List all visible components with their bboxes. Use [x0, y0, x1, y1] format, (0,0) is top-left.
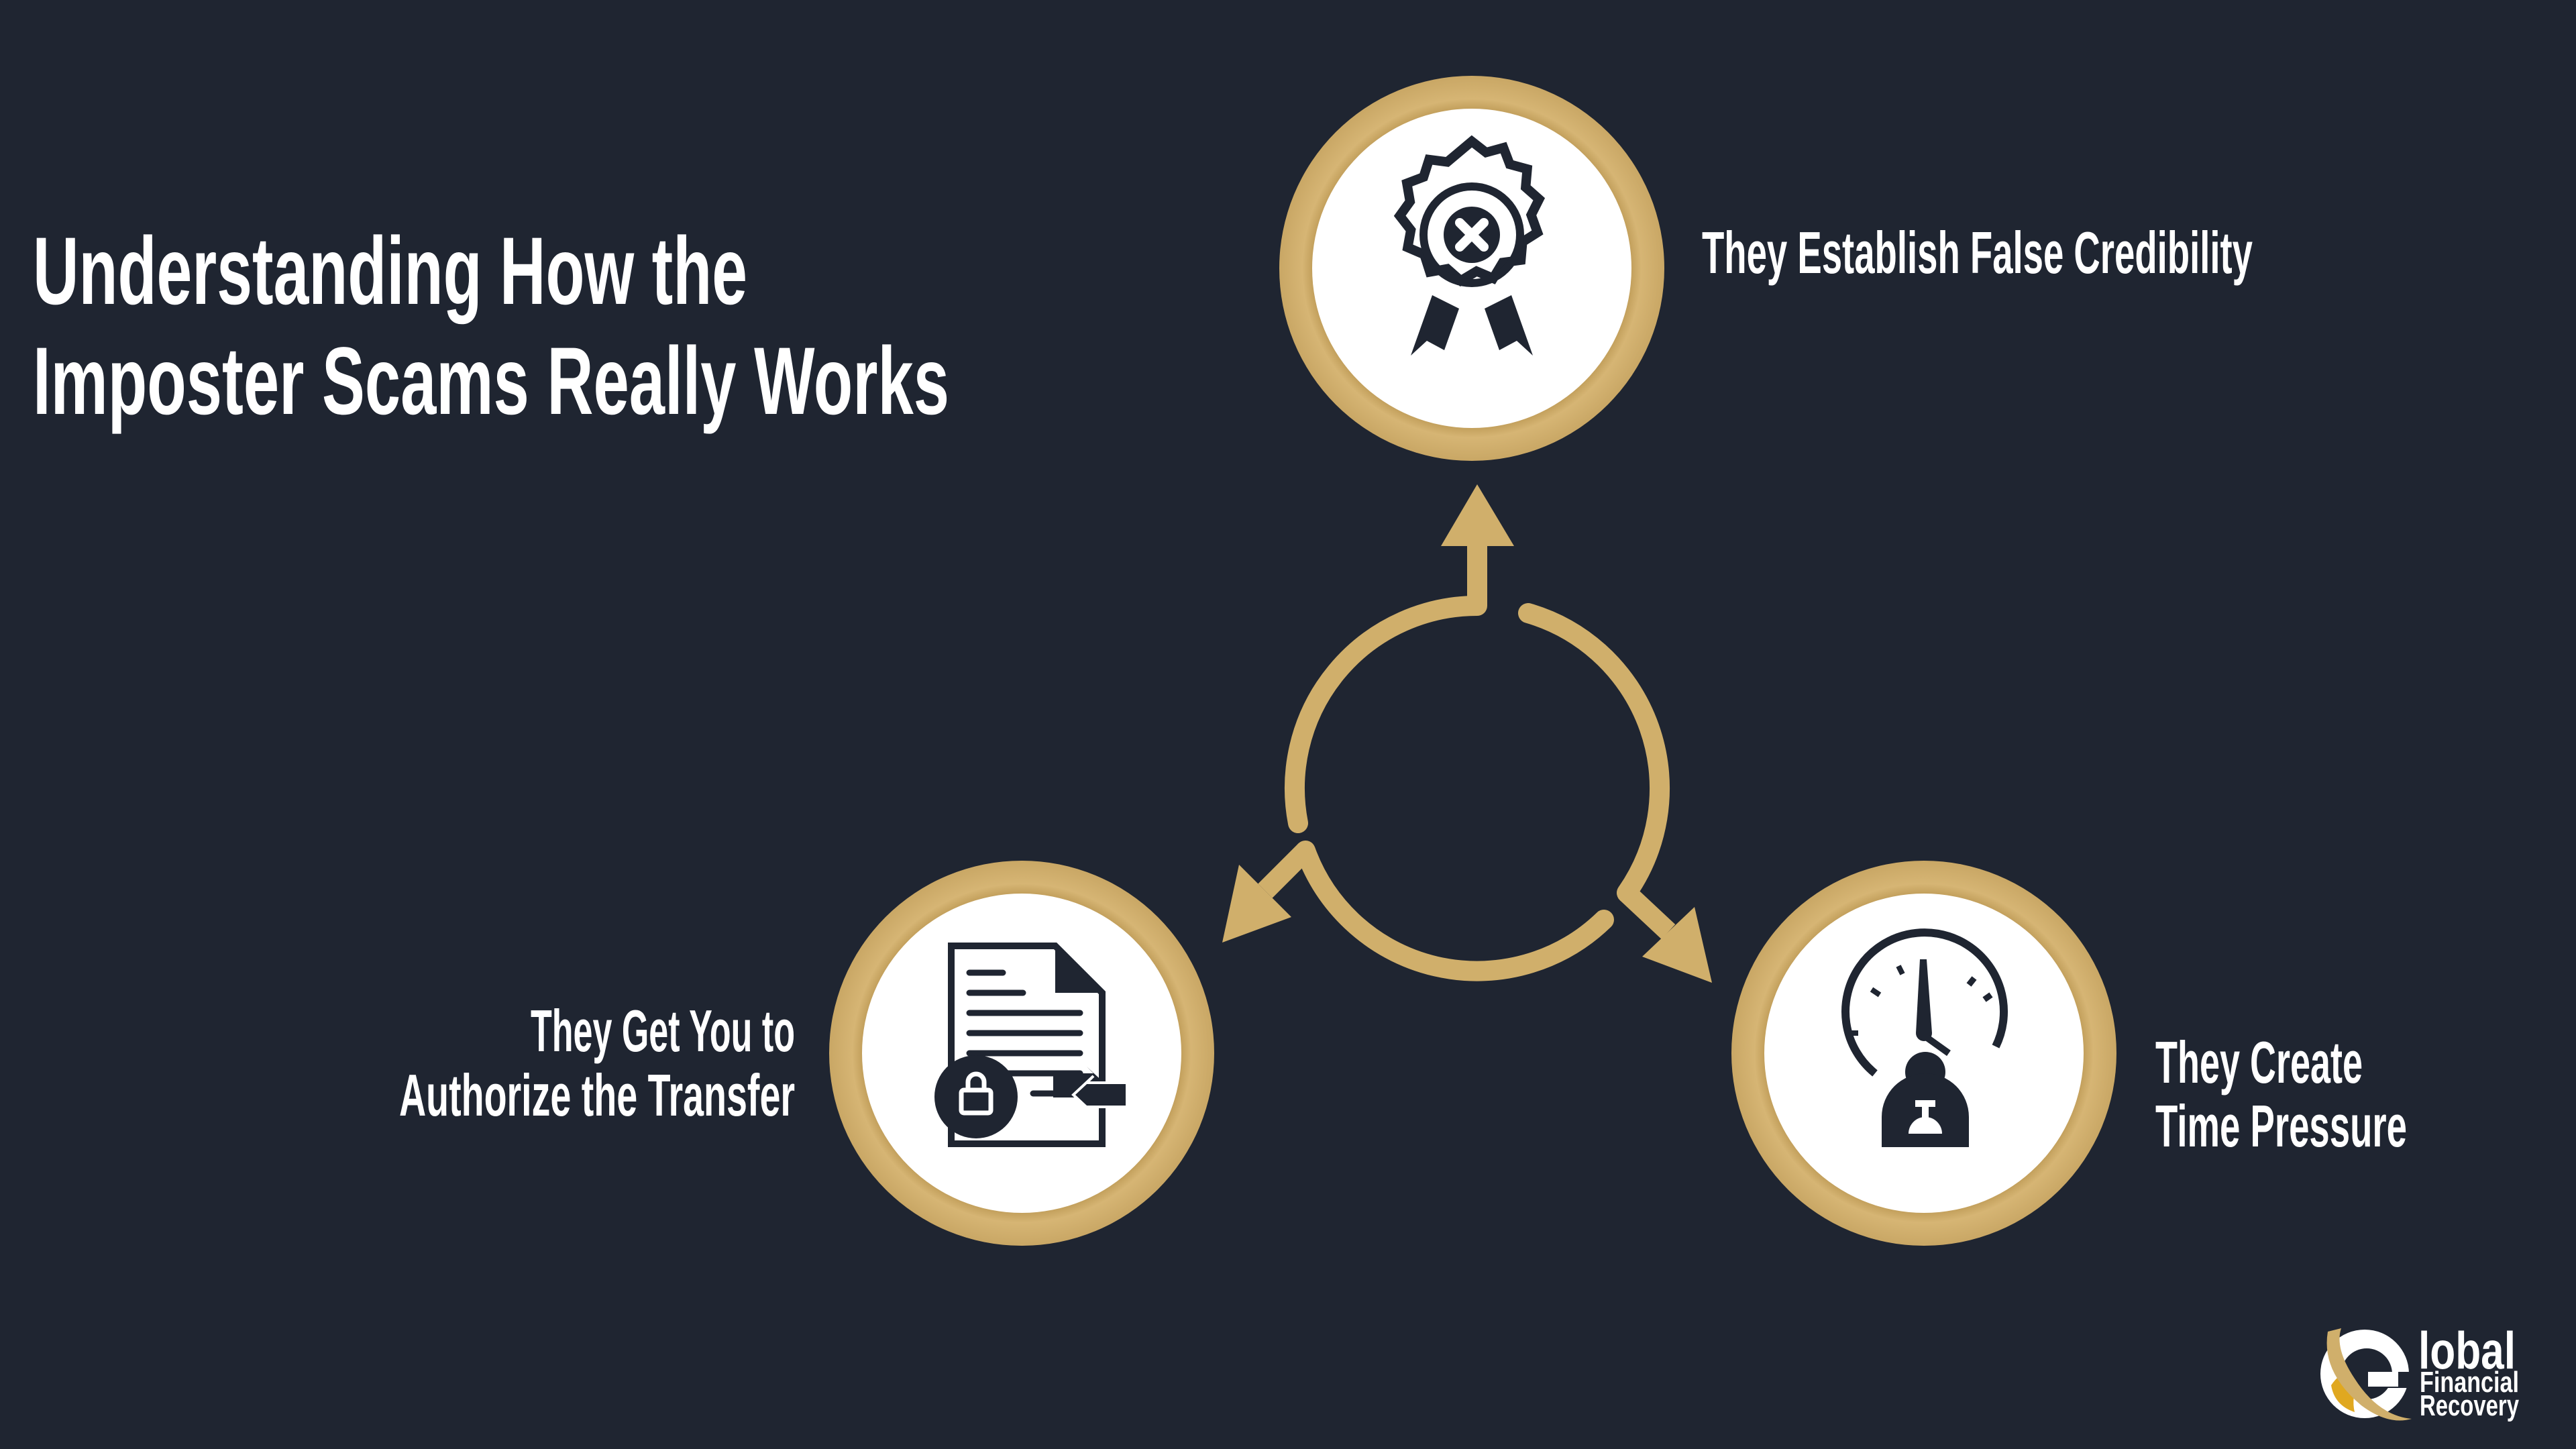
step 3 label: Time Pressure: [2155, 1093, 2407, 1159]
logo: Recovery: [2420, 1389, 2519, 1422]
step 2 circle: authorize transfer: [829, 861, 1214, 1246]
arc: right with down-right arrow: [1528, 613, 1712, 983]
step 1 circle: credibility badge: [1279, 76, 1664, 461]
title: [33, 218, 949, 435]
step 3 circle: time pressure: [1731, 861, 2116, 1246]
step 3 label: They Create: [2155, 1029, 2363, 1095]
logo: lobal: [2418, 1321, 2516, 1380]
step 2 label: Authorize the Transfer: [399, 1062, 795, 1128]
logo: [2320, 1321, 2519, 1422]
step 3 label: [2155, 1029, 2407, 1159]
icon: document with lock and arrows: [934, 946, 1127, 1144]
icon: badge with x: [1400, 142, 1539, 356]
cycle ring with arrows: [1222, 484, 1712, 983]
arc: top-left with up arrow: [1295, 484, 1514, 823]
step 1 label: They Establish False Credibility: [1702, 219, 2253, 286]
logo: Financial: [2420, 1366, 2519, 1399]
title: Imposter Scams Really Works: [33, 328, 949, 435]
step 2 label: They Get You to: [531, 998, 795, 1064]
arc: bottom with down-left arrow: [1222, 851, 1604, 971]
icon: clock over person: [1845, 932, 2004, 1147]
step 2 label: [399, 998, 795, 1128]
title: Understanding How the: [33, 218, 747, 325]
